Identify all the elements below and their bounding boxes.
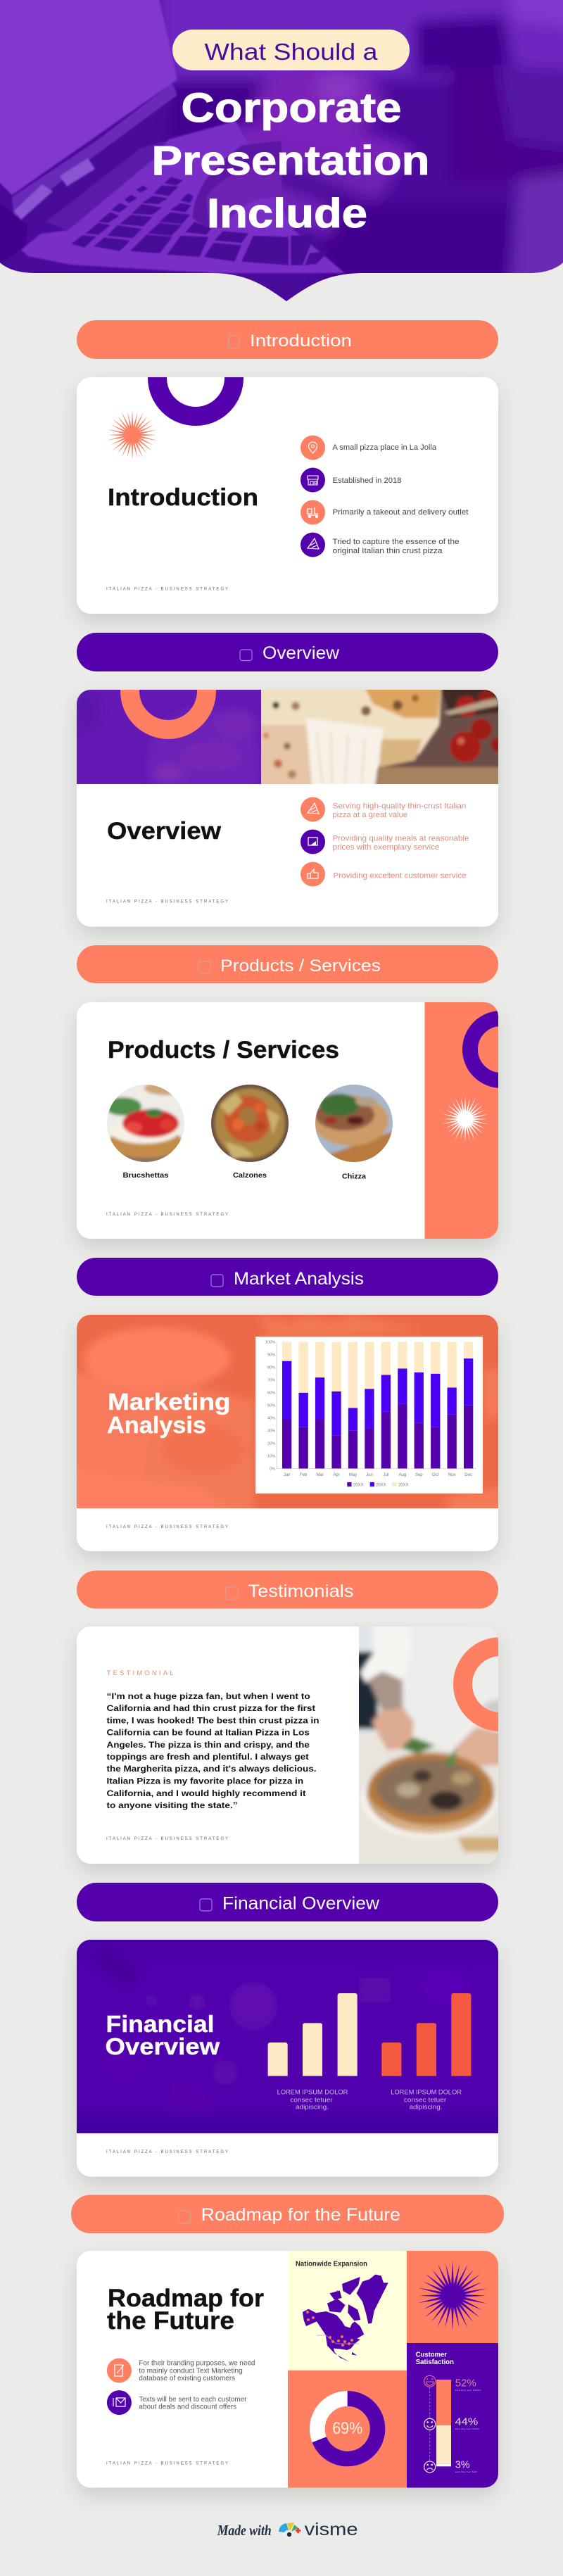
quote text: the Margherita pizza, and it's always delicious. <box>107 1764 317 1774</box>
stacked bar chart: 10% <box>267 1455 275 1459</box>
bullet: text marketing: database of existing customers <box>139 2374 235 2382</box>
product labels: Calzones <box>233 1171 267 1180</box>
smiley: sad <box>424 2461 436 2473</box>
food photo: calzone <box>211 1085 289 1162</box>
section pill: Roadmap for the Future <box>71 2195 504 2233</box>
slide heading: Roadmap for <box>108 2285 264 2312</box>
bullet: text marketing: to mainly conduct Text Marketing <box>139 2366 243 2375</box>
slide footer: ITALIAN PIZZA - BUSINESS STRATEGY <box>106 1213 228 1217</box>
quote text: “I'm not a huge pizza fan, but when I went to <box>107 1691 310 1701</box>
bullet: pizza slice: Tried to capture the essence of the <box>332 538 459 546</box>
bar caption left <box>277 2089 348 2111</box>
ring decoration <box>120 690 216 739</box>
pill: What Should a: What Should a <box>204 39 378 65</box>
bullet: thumbs up: Providing excellent customer service <box>334 871 466 880</box>
bullet: thumbs up <box>301 861 466 887</box>
bullet: reasonable prices: Providing quality meals at reasonable <box>332 835 469 843</box>
slide: Financial Overview <box>56 1921 521 2176</box>
section pill: Products / Services <box>77 945 498 983</box>
bullet: quality pizza: pizza at a great value <box>332 811 407 819</box>
laptop screen <box>0 0 177 265</box>
map: north america <box>303 2275 388 2362</box>
chart title: Marketing <box>108 1389 231 1415</box>
bar caption right: adipiscing. <box>410 2104 442 2111</box>
stacked bar chart: Jul <box>384 1473 388 1477</box>
eyebrow label: TESTIMONIAL <box>107 1669 173 1677</box>
slide heading: Products / Services <box>108 1037 339 1063</box>
header banner with laptop photo <box>0 0 563 303</box>
stacked bar chart: Dec <box>464 1473 472 1477</box>
chart legend: 20XX <box>398 1484 409 1488</box>
sunburst <box>107 410 158 460</box>
stacked bar chart: Feb <box>300 1473 308 1477</box>
bullet: location: A small pizza place in La Jolla <box>332 443 436 452</box>
bar caption right: LOREM IPSUM DOLOR <box>391 2089 462 2096</box>
stacked bar chart: Nov <box>448 1473 456 1477</box>
section pill: Financial Overview <box>77 1883 498 1921</box>
stacked bar chart: Jun <box>366 1473 373 1477</box>
title: Include <box>207 191 367 236</box>
section pill: Products / Services: Products / Services <box>220 956 381 976</box>
coral side panel <box>425 1002 498 1239</box>
donut chart 69%: 69% <box>332 2419 362 2438</box>
quote text <box>107 1691 319 1810</box>
slide heading: Introduction <box>108 484 258 511</box>
stacked bar chart: 100% <box>265 1341 275 1345</box>
stat: 44%: 44% <box>455 2416 478 2428</box>
bar caption left: consec tetuer <box>290 2096 333 2103</box>
food photo: chizza <box>315 1085 393 1162</box>
slide footer: ITALIAN PIZZA - BUSINESS STRATEGY <box>106 900 228 904</box>
customer satisfaction heading <box>416 2350 454 2366</box>
stacked bar chart: Aug <box>398 1473 406 1477</box>
quote text: California, and I would highly recommend it <box>107 1788 305 1798</box>
quote text: toppings are fresh and plentiful. I always get <box>107 1752 309 1762</box>
title: Presentation <box>152 138 429 184</box>
quote text: to anyone visiting the state.” <box>107 1800 238 1810</box>
slide footer: ITALIAN PIZZA - BUSINESS STRATEGY <box>106 2461 228 2465</box>
bar caption right <box>391 2089 462 2111</box>
made with visme credit: Made with <box>217 2522 272 2539</box>
bullet: scooter: Primarily a takeout and delivery outlet <box>332 508 469 517</box>
stacked bar chart <box>255 1337 483 1494</box>
satisfaction stacked bar <box>430 2380 451 2466</box>
slide: Testimonial <box>77 1617 538 1874</box>
slide: Roadmap for the Future <box>77 2251 498 2488</box>
donut chart 69% <box>317 2399 378 2459</box>
bullet: pizza slice: original Italian thin crust pizza <box>332 547 442 555</box>
title: Corporate <box>182 85 401 131</box>
quote text: California can be found at Italian Pizza in Los <box>107 1728 310 1738</box>
bar caption left: adipiscing. <box>296 2104 329 2111</box>
slide heading: Financial <box>106 2011 214 2037</box>
stacked bar chart: 90% <box>267 1353 275 1358</box>
slide: Overview <box>71 690 504 940</box>
stacked bar chart: Jan <box>284 1473 291 1477</box>
bullet: store <box>301 467 401 493</box>
section pill: Overview <box>77 633 498 671</box>
bullet: text marketing <box>107 2358 255 2383</box>
product labels: Brucshettas <box>122 1171 169 1180</box>
chart legend <box>347 1482 409 1488</box>
stat: 3%: said they feel SAD <box>455 2470 478 2473</box>
bullet: text marketing: For their branding purposes, we need <box>139 2359 255 2368</box>
section pill: Market Analysis <box>77 1258 498 1296</box>
product labels <box>122 1171 366 1181</box>
laptop base <box>21 121 345 273</box>
stacked bar chart: 30% <box>267 1429 275 1434</box>
quote text: Italian Pizza is my favorite place for pizza in <box>107 1776 303 1786</box>
food photo: bruschetta <box>107 1085 184 1162</box>
bullet: reasonable prices: prices with exemplary service <box>332 843 439 852</box>
smiley: good <box>424 2418 436 2430</box>
customer satisfaction heading: Customer <box>416 2350 447 2359</box>
stacked bar chart: 60% <box>267 1391 275 1396</box>
stacked bar chart: Sep <box>415 1473 423 1477</box>
bar caption left: LOREM IPSUM DOLOR <box>277 2089 348 2096</box>
slide heading <box>106 2011 220 2059</box>
top band with purple photo and pizza photo <box>77 690 498 784</box>
bullet: store: Established in 2018 <box>332 476 401 485</box>
smiley: happy <box>424 2375 436 2387</box>
bullet: quality pizza: Serving high-quality thin-crust Italian <box>332 802 466 811</box>
colour panels <box>288 2251 498 2488</box>
made with visme credit <box>217 2520 358 2539</box>
bullet: deals: Texts will be sent to each customer <box>139 2395 247 2404</box>
bullet: pizza slice <box>301 532 459 557</box>
title <box>154 93 427 228</box>
bullet: scooter <box>301 500 469 525</box>
icon: visme logo <box>279 2523 301 2537</box>
bar caption right: consec tetuer <box>404 2096 446 2103</box>
purple sunburst <box>418 2261 487 2331</box>
stacked bar chart: Mar <box>316 1473 324 1477</box>
section pill: Roadmap for the Future: Roadmap for the Future <box>201 2205 400 2225</box>
stacked bar chart: Apr <box>333 1473 340 1477</box>
slide footer: ITALIAN PIZZA - BUSINESS STRATEGY <box>106 2150 228 2154</box>
product labels: Chizza <box>342 1173 366 1181</box>
chef photo <box>359 1627 498 1864</box>
slide footer: ITALIAN PIZZA - BUSINESS STRATEGY <box>106 1837 228 1841</box>
stat: 52%: 52% <box>455 2378 476 2389</box>
red bars <box>381 1993 471 2076</box>
ring decoration <box>148 377 243 426</box>
customer satisfaction heading: Satisfaction <box>416 2358 454 2366</box>
slide footer: ITALIAN PIZZA - BUSINESS STRATEGY <box>106 587 228 591</box>
chart legend: 20XX <box>353 1484 364 1488</box>
bullet: deals <box>107 2390 247 2415</box>
slide heading: Overview <box>107 818 222 845</box>
stacked bar chart: 0% <box>270 1467 275 1472</box>
stacked bar chart: 70% <box>267 1379 275 1383</box>
quote text: Angeles. The pizza is thin and crispy, and the <box>107 1740 310 1750</box>
stacked bar chart: 20% <box>267 1442 275 1446</box>
bullet: quality pizza <box>301 797 466 822</box>
stat: 3% <box>455 2459 478 2473</box>
stat: 52% <box>455 2378 481 2392</box>
pill: What Should a <box>172 30 410 70</box>
map heading: Nationwide Expansion <box>296 2259 367 2268</box>
section pill: Financial Overview: Financial Overview <box>222 1893 380 1913</box>
slide heading <box>107 2285 264 2335</box>
slide footer: ITALIAN PIZZA - BUSINESS STRATEGY <box>106 1525 228 1529</box>
bullet: location <box>301 435 436 460</box>
slide heading: the Future <box>107 2307 234 2335</box>
stacked bar chart: 40% <box>267 1417 275 1421</box>
chart legend: 20XX <box>376 1484 386 1488</box>
section pill: Introduction: Introduction <box>250 332 352 351</box>
stat: 44%: said they feel GOOD <box>455 2427 480 2430</box>
section pill: Market Analysis: Market Analysis <box>234 1269 364 1289</box>
chart heading second line: Analysis <box>107 1412 206 1438</box>
coral photo band <box>77 1315 498 1508</box>
stacked bar chart: 80% <box>267 1366 275 1370</box>
section pill: Overview: Overview <box>262 643 340 663</box>
keyboard keys <box>72 141 329 265</box>
bullet: deals: about deals and discount offers <box>139 2403 236 2411</box>
section pill: Introduction <box>77 320 498 359</box>
stat: 3%: 3% <box>455 2459 470 2471</box>
slide heading: Overview <box>106 2033 220 2059</box>
bullet: reasonable prices <box>301 829 469 854</box>
section pill: Testimonials <box>77 1571 498 1609</box>
white sunburst <box>442 1096 488 1142</box>
slide: Introduction <box>77 339 498 614</box>
quote text: California and had thin crust pizza for the first <box>107 1703 315 1713</box>
stacked bar chart: May <box>349 1473 357 1477</box>
stacked bar chart: 50% <box>267 1404 275 1408</box>
stacked bar chart: Oct <box>432 1473 439 1477</box>
section pill: Testimonials: Testimonials <box>248 1581 353 1601</box>
made with visme credit: visme <box>305 2520 358 2539</box>
slide: Products / Services <box>77 1002 532 1239</box>
cream bars <box>268 1993 358 2076</box>
ring decoration <box>453 1637 498 1731</box>
purple photo band <box>77 1940 498 2133</box>
quote text: time, I was hooked! The best thin crust pizza in <box>107 1715 319 1725</box>
slide: Marketing Analysis <box>56 1315 514 1551</box>
stat: 52%: said they feel HAPPY <box>455 2389 481 2392</box>
